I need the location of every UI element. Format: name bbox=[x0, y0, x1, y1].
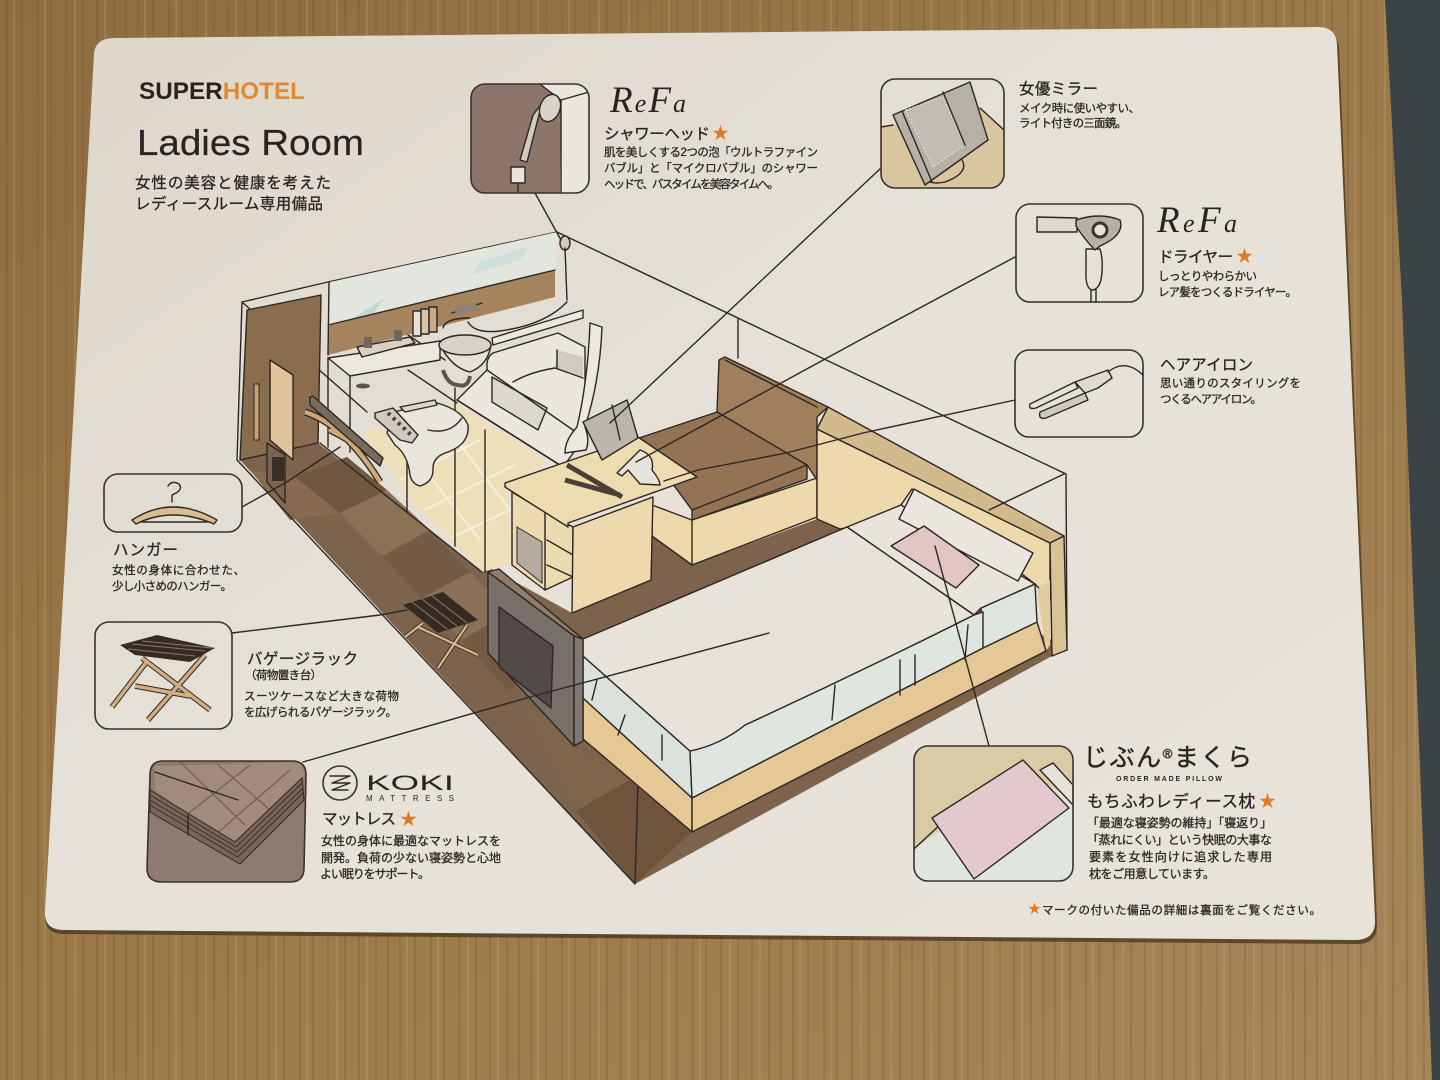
white card bbox=[45, 27, 1375, 940]
floor bbox=[240, 443, 1052, 884]
headboard bbox=[817, 407, 1067, 656]
dryer text bbox=[1156, 200, 1297, 299]
vanity counter and shelf bbox=[328, 310, 583, 452]
hanger text bbox=[112, 541, 245, 593]
back pillow bbox=[899, 489, 1033, 581]
shower text: ヘッドで、バスタイムを美容タイムへ。 bbox=[604, 177, 779, 191]
table bbox=[505, 437, 697, 613]
pillow text: ★ bbox=[1259, 792, 1276, 811]
shower text: シャワーヘッド bbox=[604, 126, 710, 143]
bed skirt left bbox=[583, 656, 692, 798]
subtitle bbox=[135, 174, 331, 213]
shower text: バブル」と「マイクロバブル」のシャワー bbox=[604, 161, 818, 175]
icon: hair iron bbox=[1015, 350, 1143, 437]
mattress text: ★ bbox=[400, 810, 417, 829]
actress mirror text: 女優ミラー bbox=[1019, 80, 1098, 98]
pink pillow bbox=[891, 526, 979, 588]
luggage rack in scene bbox=[403, 592, 478, 668]
pillow text: 枕をご用意しています。 bbox=[1089, 866, 1215, 881]
icon: shower head bbox=[471, 84, 589, 193]
actress mirror text: メイク時に使いやすい、 bbox=[1019, 101, 1140, 115]
door bbox=[240, 295, 321, 460]
hair iron text: ヘアアイロン bbox=[1160, 357, 1253, 374]
logo: SUPERHOTEL: SUPERHOTEL bbox=[139, 78, 305, 105]
footnote: ★ bbox=[1028, 901, 1041, 916]
bathroom partition lines bbox=[320, 388, 563, 572]
bathroom tile floor bbox=[363, 403, 547, 572]
shower text: ReFa bbox=[609, 80, 686, 121]
icon: pillow bbox=[914, 746, 1073, 881]
footnote: マークの付いた備品の詳細は裏面をご覧ください。 bbox=[1042, 903, 1321, 917]
tabletop irons bbox=[565, 465, 622, 497]
pillow text bbox=[1087, 791, 1276, 881]
shower text: 肌を美しくする2つの泡「ウルトラファイン bbox=[604, 145, 818, 159]
shower text: ★ bbox=[712, 124, 729, 143]
mirror and wall strip bbox=[328, 232, 557, 355]
tabletop dryer bbox=[617, 450, 660, 485]
title: Ladies Room: Ladies Room bbox=[137, 122, 364, 163]
actress mirror text bbox=[1019, 80, 1140, 130]
pillow text: もちふわレディース枕 bbox=[1087, 791, 1255, 811]
luggage rack text bbox=[244, 650, 399, 719]
shower text bbox=[604, 80, 818, 191]
pillow text: 「蒸れにくい」という快眠の大事な bbox=[1087, 833, 1272, 847]
KOKI mattress logo: KOKI bbox=[366, 772, 454, 795]
hanging panel bbox=[254, 360, 293, 503]
hair iron text bbox=[1160, 357, 1301, 406]
icon: luggage rack bbox=[95, 622, 232, 729]
actress mirror text: ライト付きの三面鏡。 bbox=[1019, 117, 1127, 130]
bed mattress head bbox=[981, 584, 1037, 648]
room isometric illustration bbox=[237, 232, 1067, 884]
pillow text: 要素を女性向けに追求した専用 bbox=[1089, 849, 1272, 864]
hanger text: ハンガー bbox=[113, 541, 178, 559]
KOKI mattress logo: MATTRESS bbox=[366, 794, 454, 803]
KOKI mattress logo bbox=[323, 766, 454, 803]
jibun makura logo: ORDER MADE PILLOW bbox=[1116, 776, 1222, 783]
toiletries and tray bbox=[357, 302, 567, 357]
dryer text: ドライヤー bbox=[1158, 249, 1233, 266]
mattress text: マットレス bbox=[322, 811, 396, 828]
icon: mattress bbox=[147, 761, 307, 883]
jibun makura logo: じぶん bbox=[1083, 744, 1161, 772]
pillow text: 「最適な寝姿勢の維持」「寝返り」 bbox=[1087, 815, 1272, 830]
callout lines bbox=[232, 168, 1064, 762]
skirt folds bbox=[592, 625, 968, 760]
jibun makura logo: まくら bbox=[1174, 744, 1252, 772]
hanger text: 少し小さめのハンガー。 bbox=[112, 579, 232, 593]
sofa bbox=[639, 357, 828, 565]
hair iron text: 思い通りのスタイリングを bbox=[1160, 376, 1301, 390]
dryer text: ReFa bbox=[1156, 200, 1237, 241]
dryer text: しっとりやわらかい bbox=[1158, 270, 1257, 283]
dryer text: ★ bbox=[1236, 247, 1253, 266]
bed sheet back bbox=[847, 505, 1035, 615]
basin bbox=[439, 335, 491, 386]
icon: hair dryer bbox=[1016, 204, 1143, 302]
jibun makura logo bbox=[1083, 744, 1252, 783]
bathtub bbox=[457, 333, 585, 467]
bed base left bbox=[583, 698, 692, 832]
card shadow bbox=[45, 33, 1377, 944]
curtain bbox=[565, 323, 602, 453]
bed top bbox=[583, 527, 974, 751]
hanger rack bbox=[305, 396, 383, 482]
mattress text: 女性の身体に最適なマットレスを bbox=[321, 833, 501, 848]
shower hose in scene bbox=[560, 236, 570, 300]
bed skirt right bbox=[690, 612, 983, 798]
luggage rack text: （荷物置き台） bbox=[245, 668, 322, 682]
icon: hanger bbox=[104, 474, 242, 532]
room wire edges bbox=[237, 232, 1067, 884]
mattress text: よい眠りをサポート。 bbox=[320, 867, 430, 881]
luggage rack text: スーツケースなど大きな荷物 bbox=[244, 689, 399, 703]
jibun makura logo: ® bbox=[1163, 746, 1173, 761]
hair iron text: つくるヘアアイロン。 bbox=[1160, 394, 1262, 406]
toilet bbox=[375, 400, 468, 486]
icon: actress mirror bbox=[881, 79, 1004, 188]
mattress text bbox=[320, 810, 501, 881]
luggage rack text: バゲージラック bbox=[247, 650, 358, 668]
subtitle: 女性の美容と健康を考えた bbox=[135, 174, 331, 192]
TV panel bbox=[488, 569, 583, 746]
hanger text: 女性の身体に合わせた、 bbox=[112, 563, 245, 577]
dryer text: レア髪をつくるドライヤー。 bbox=[1158, 285, 1297, 299]
tabletop mirror bbox=[583, 400, 638, 460]
beige wall bbox=[817, 429, 1050, 600]
mattress text: 開発。負荷の少ない寝姿勢と心地 bbox=[321, 850, 501, 865]
luggage rack text: を広げられるバゲージラック。 bbox=[244, 706, 397, 719]
subtitle: レディースルーム専用備品 bbox=[135, 194, 323, 213]
bed base right bbox=[692, 622, 1046, 832]
